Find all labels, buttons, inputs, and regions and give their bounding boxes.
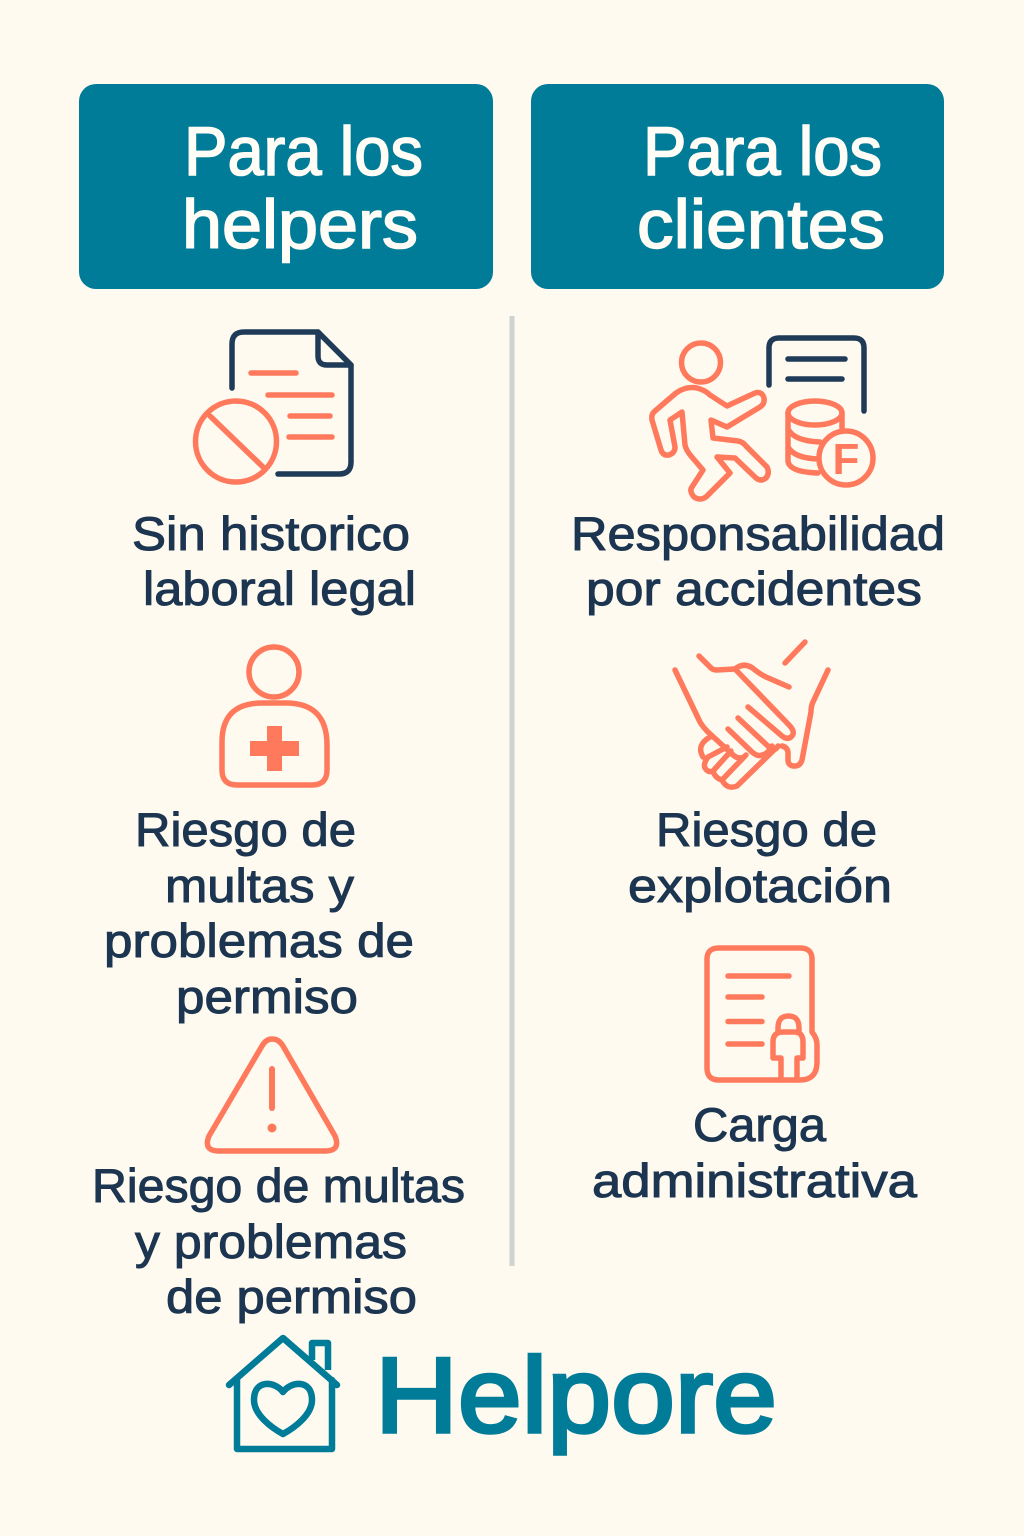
text: Riesgo de multas y problemas de permiso (2) — [92, 1159, 465, 1323]
heading: Para los clientes: clientes — [637, 186, 885, 263]
text: Riesgo de multas y problemas de permiso (2): Riesgo de multas — [92, 1159, 465, 1212]
text: Sin historico laboral legal: Sin historico — [132, 507, 410, 560]
text: Responsabilidad por accidentes — [571, 507, 945, 615]
icon: person with medical cross — [222, 647, 327, 785]
text: Carga administrativa: administrativa — [592, 1154, 918, 1207]
text: Riesgo de explotación: Riesgo de — [656, 803, 877, 856]
text: Riesgo de multas y problemas de permiso: problemas de — [104, 914, 414, 967]
heading: Para los clientes — [531, 84, 944, 289]
panel: clientes — [571, 338, 945, 1207]
heading: Para los helpers: Para los — [184, 113, 423, 190]
text: Sin historico laboral legal — [132, 507, 416, 615]
icon: house with heart — [229, 1338, 337, 1449]
heading: Para los clientes: Para los — [643, 113, 882, 190]
icon: person falling, document and coins with F — [652, 338, 873, 499]
text: Riesgo de multas y problemas de permiso (2): y problemas — [135, 1215, 407, 1268]
text: Responsabilidad por accidentes: Responsabilidad — [571, 507, 945, 560]
icon: person falling, document and coins with F: F — [833, 435, 859, 484]
text: Responsabilidad por accidentes: por accidentes — [586, 562, 922, 615]
text: Carga administrativa: Carga — [693, 1098, 827, 1151]
text: Riesgo de explotación: explotación — [628, 859, 892, 912]
text: Riesgo de multas y problemas de permiso: multas y — [165, 859, 355, 912]
text: Riesgo de explotación — [628, 803, 892, 912]
heading: Para los helpers: helpers — [182, 186, 418, 263]
text: Helpore wordmark: Helpore — [375, 1335, 777, 1455]
text: Sin historico laboral legal: laboral legal — [143, 562, 416, 615]
panel: helpers — [92, 332, 465, 1323]
icon: warning triangle — [207, 1039, 337, 1151]
text: Riesgo de multas y problemas de permiso: Riesgo de — [135, 803, 356, 856]
heading: Para los helpers — [79, 84, 493, 289]
icon: document with prohibition sign — [196, 332, 351, 482]
text: Riesgo de multas y problemas de permiso: permiso — [176, 970, 358, 1023]
text: Carga administrativa — [592, 1098, 918, 1207]
icon: handshake — [675, 642, 828, 787]
logo: Helpore — [229, 1335, 777, 1455]
text: Riesgo de multas y problemas de permiso (2): de permiso — [166, 1270, 417, 1323]
text: Riesgo de multas y problemas de permiso — [104, 803, 414, 1023]
icon: document with person — [707, 948, 817, 1080]
